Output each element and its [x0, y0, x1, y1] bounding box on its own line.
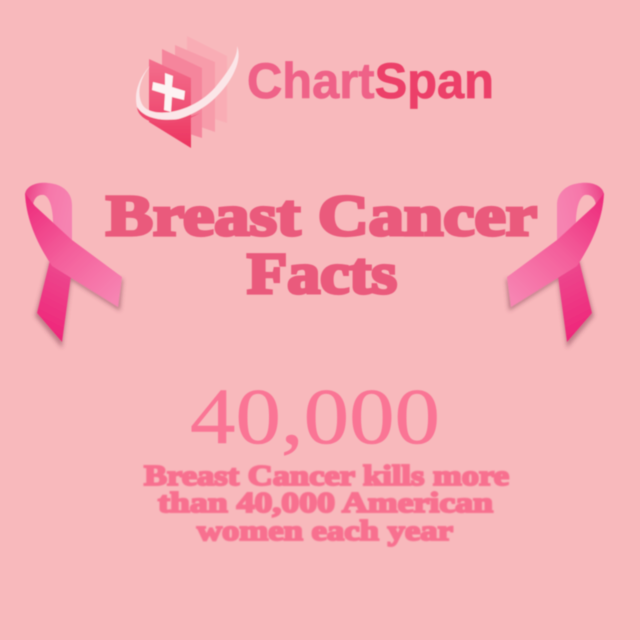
title [106, 183, 537, 306]
fact text [144, 461, 509, 547]
icon: layered sheets with cross [136, 36, 239, 148]
fact text: Breast Cancer kills more [144, 461, 509, 492]
fact text: than 40,000 American [158, 488, 494, 519]
fact text: women each year [197, 516, 453, 547]
logo wordmark: ChartSpan [247, 53, 494, 109]
logo: ChartSpan [136, 36, 494, 148]
icon: left pink ribbon [25, 183, 123, 348]
big number: 40,000 [190, 374, 440, 461]
title: Facts [247, 241, 397, 306]
icon: right pink ribbon [506, 183, 604, 348]
title: Breast Cancer [106, 183, 537, 248]
